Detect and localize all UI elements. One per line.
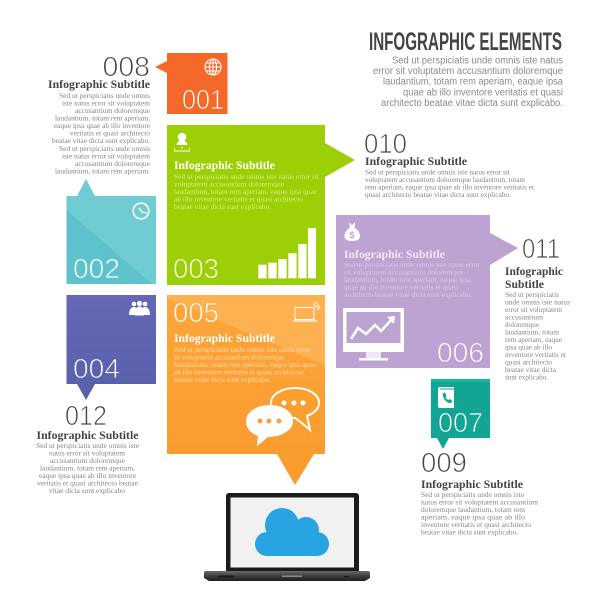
- callout text: 008: eaque ipsa quae ab illo inventore: [54, 122, 150, 130]
- panel: 006 purple: Sed ut perspiciatis unde omnis iste natus error: [344, 261, 481, 269]
- callout text: 009: [421, 447, 539, 536]
- panel: 005 orange: [167, 295, 325, 485]
- intro text block: laudantium, totam rem aperiam, eaque ipsa: [383, 77, 563, 88]
- callout text: 011: quasi architecto: [505, 358, 553, 366]
- callout text: 011: unde omnis iste natus: [505, 298, 570, 306]
- callout text: 011: sunt explicabo.: [505, 374, 548, 382]
- callout text: 008: [48, 51, 151, 175]
- callout text: 012: vitae dicta sunt explicabo: [49, 487, 126, 495]
- callout text: 011: error sit voluptatem: [505, 306, 563, 314]
- callout text: 010: [364, 128, 534, 199]
- callout text: 008: laudantium, totam rem aperiam.: [55, 167, 150, 175]
- callout text: 009: aperiam, eaque ipsa quae ab illo: [421, 514, 526, 522]
- panel: 005 orange: Sed ut perspiciatis unde omnis iste natus error: [174, 346, 312, 354]
- callout text: 011: accusantium: [505, 314, 544, 322]
- callout text: 008: Infographic Subtitle: [48, 79, 150, 91]
- callout text: 009: doloremque laudantium, totam rem: [421, 506, 526, 514]
- panel: 004 indigo: [66, 295, 156, 400]
- callout text: 012: Infographic Subtitle: [36, 430, 138, 442]
- callout text: 008: accusantium doloremque: [75, 107, 150, 115]
- callout text: 012: Sed ut perspiciatis unde omnis iste: [36, 442, 139, 450]
- callout text: 009: 009: [421, 447, 467, 478]
- intro text block: error sit voluptatem accusantium doloremque: [373, 66, 563, 77]
- panel: 007 teal green: [431, 379, 490, 449]
- icon: people: [129, 301, 150, 316]
- callout text: 012: laudantium, totam rem aperiam,: [40, 464, 135, 472]
- panel: 002 teal: [66, 179, 156, 284]
- callout text: 010: 010: [364, 128, 407, 159]
- panel: 006 purple: architecto beatae vitae dicta sunt explicabo.: [344, 291, 472, 299]
- panel: 003 green: ab illo inventore veritatis et quasi architecto: [174, 196, 304, 204]
- icon: clock: [133, 203, 149, 219]
- callout text: 008: veritatis et quasi architecto: [70, 130, 151, 138]
- callout text: 011: doloremque: [505, 321, 539, 329]
- panel: 006 purple: sit voluptatem accusantium doloremque: [344, 268, 463, 276]
- callout text: 011: Subtitle: [505, 279, 544, 291]
- callout text: 010: voluptatem accusantium doloremque laudantium, totam: [365, 176, 526, 184]
- intro text block: quae ab illo inventore veritatis et quasi: [403, 88, 563, 98]
- panel: 006 purple: Infographic Subtitle: [344, 249, 445, 261]
- callout text: 011: Sed ut perspiciatis: [505, 291, 559, 299]
- callout text: 010: quasi architecto beatae vitae dicta sunt explicabo.: [365, 191, 511, 199]
- callout text: 011: [505, 233, 570, 382]
- panel: 004 indigo: 004: [73, 353, 120, 384]
- callout text: 010: Infographic Subtitle: [365, 156, 467, 168]
- icon: money bag: [344, 222, 360, 241]
- callout text: 011: beatae vitae dicta: [505, 366, 557, 374]
- callout text: 008: accusantium doloremque: [75, 160, 150, 168]
- callout text: 008: Sed ut perspiciatis unde omnis: [59, 145, 150, 153]
- callout text: 009: natus error sit voluptatem accusantium: [421, 498, 539, 506]
- icon: monitor with rising line: [343, 308, 404, 360]
- callout text: 008: iste natus error sit voluptatem: [62, 100, 151, 108]
- panel: 005 orange: Infographic Subtitle: [174, 333, 275, 345]
- panel: 005 orange: sit voluptatem accusantium doloremque: [174, 354, 284, 362]
- panel: 007 teal green: 007: [438, 407, 483, 438]
- panel: 003 green: voluptatem accusantium doloremque: [174, 180, 284, 188]
- intro text block: Sed ut perspiciatis unde omnis iste natus: [392, 56, 563, 66]
- callout text: 010: Sed ut perspiciatis unde omnis iste natus error sit: [365, 168, 510, 176]
- callout text: 011: 011: [522, 233, 560, 264]
- panel: 001 orange: [155, 53, 228, 115]
- panel: 006 purple: laudantium, totam rem aperiam, eaque ipsa: [344, 276, 472, 284]
- panel: 005 orange: 005: [173, 297, 219, 328]
- callout text: 008: iste natus error sit voluptatem: [62, 152, 151, 160]
- panel: 003 green: 003: [173, 253, 219, 284]
- callout text: 010: rem aperiam, eaque ipsa quae ab illo inventore veritatis et: [365, 184, 534, 192]
- callout text: 011: inventore veritatis et: [505, 351, 566, 359]
- intro text block: architecto beatae vitae dicta sunt explicabo.: [381, 98, 563, 109]
- panel: 006 purple: 006: [437, 337, 484, 368]
- callout text: 011: Infographic: [505, 266, 563, 278]
- callout text: 012: eaque ipsa quae ab illo inventore: [39, 472, 136, 480]
- panel: 006 purple: quae ab illo inventore veritatis et quasi: [344, 284, 458, 292]
- panel: 003 green: [167, 125, 355, 285]
- laptop with cloud: [204, 493, 370, 581]
- icon: chat bubbles: [246, 388, 319, 446]
- panel: 003 green: laudantium, totam rem aperiam, eaque ipsa quae: [174, 188, 317, 196]
- callout text: 012: 012: [65, 400, 107, 431]
- callout text: 011: laudantium, totam: [505, 328, 560, 336]
- callout text: 008: Sed ut perspiciatis unde omnis: [59, 92, 150, 100]
- icon: phone book: [438, 387, 454, 408]
- panel: 005 orange: laudantium, totam rem aperiam, eaque ipsa quae: [174, 361, 316, 369]
- panel: 005 orange: beatae vitae dicta sunt explicabo.: [174, 376, 271, 384]
- callout text: 012: natus error sit voluptatem: [49, 450, 126, 458]
- callout text: 011: ipsa quae ab illo: [505, 344, 553, 352]
- callout text: 012: [36, 400, 139, 495]
- icon: user on tray: [174, 133, 190, 152]
- icon: cloud: [255, 508, 329, 556]
- callout text: 008: laudantium, totam rem aperiam,: [55, 115, 150, 123]
- panel: 003 green: beatae vitae dicta sunt explicabo.: [174, 203, 271, 211]
- callout text: 011: rem aperiam, eaque: [505, 336, 562, 344]
- callout text: 012: veritatis et quasi architecto beatae: [37, 480, 138, 488]
- panel: 005 orange: ab illo inventore veritatis et quasi architecto: [174, 368, 304, 376]
- panel: 006 purple: [336, 215, 518, 368]
- panel: 002 teal: 002: [73, 253, 120, 284]
- icon: money bag: $: [349, 230, 355, 240]
- callout text: 009: beatae vitae dicta sunt explicabo.: [421, 528, 518, 536]
- icon: globe: [205, 59, 221, 75]
- callout text: 008: 008: [102, 51, 150, 82]
- intro text block: [373, 56, 563, 109]
- panel: 003 green: Infographic Subtitle: [174, 160, 275, 172]
- bar chart: [258, 228, 316, 278]
- callout text: 009: inventore veritatis et quasi architecto: [421, 521, 532, 529]
- callout text: 009: Sed ut perspiciatis unde omnis iste: [421, 491, 524, 499]
- callout text: 012: accusantium doloremque: [50, 457, 125, 465]
- panel: 001 orange: 001: [182, 84, 224, 115]
- callout text: 008: beatae vitae dicta sunt explicabo.: [52, 137, 150, 145]
- panel: 003 green: Sed ut perspiciatis unde omnis iste natus error sit: [174, 173, 319, 181]
- icon: wifi laptop: [293, 302, 320, 321]
- callout text: 009: Infographic Subtitle: [421, 479, 523, 491]
